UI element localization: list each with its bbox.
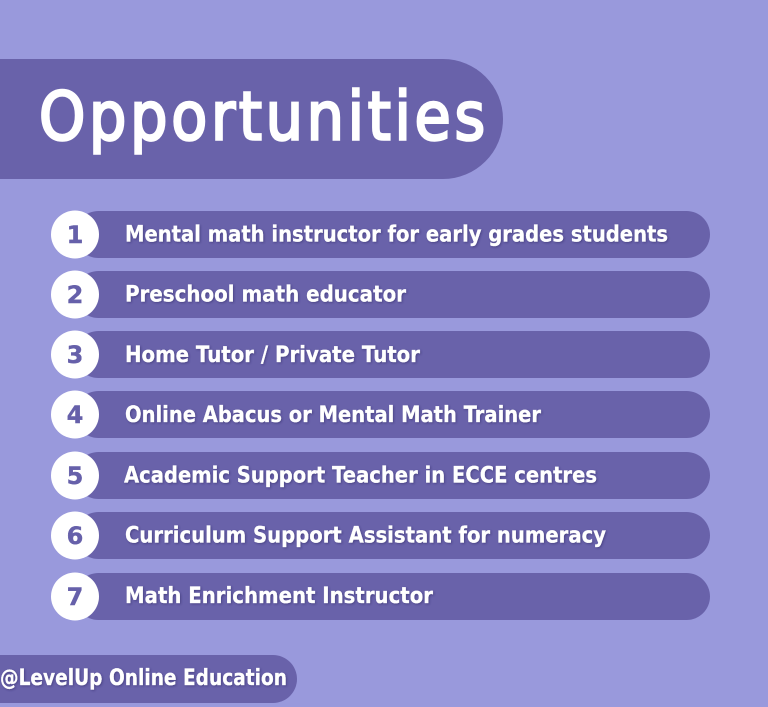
- list item 4: Online Abacus or Mental Math Trainer: [125, 402, 542, 428]
- list item 1: [51, 210, 710, 258]
- list item 5: 5: [67, 462, 83, 490]
- footer credit: @LevelUp Online Education: [0, 665, 287, 691]
- list item 5: Academic Support Teacher in ECCE centres: [124, 462, 597, 488]
- list item 2: 2: [67, 281, 83, 309]
- list item 6: 6: [67, 522, 83, 550]
- title banner: [0, 59, 503, 179]
- list item 3: [51, 330, 710, 378]
- list item 2: [51, 270, 710, 318]
- footer credit: [0, 655, 297, 703]
- list item 4: 4: [67, 401, 83, 429]
- list item 6: Curriculum Support Assistant for numeracy: [125, 522, 606, 548]
- list item 6: [51, 512, 710, 560]
- title: Opportunities: [39, 77, 485, 155]
- list item 7: 7: [67, 583, 83, 611]
- list item 3: Home Tutor / Private Tutor: [125, 342, 421, 368]
- list item 1: Mental math instructor for early grades students: [125, 222, 668, 248]
- list item 5: [51, 452, 710, 500]
- list item 2: Preschool math educator: [125, 282, 407, 308]
- list item 3: 3: [67, 341, 83, 369]
- list item 7: [51, 572, 710, 620]
- list item 1: 1: [67, 221, 83, 249]
- list item 4: [51, 390, 710, 438]
- list item 7: Math Enrichment Instructor: [125, 583, 434, 609]
